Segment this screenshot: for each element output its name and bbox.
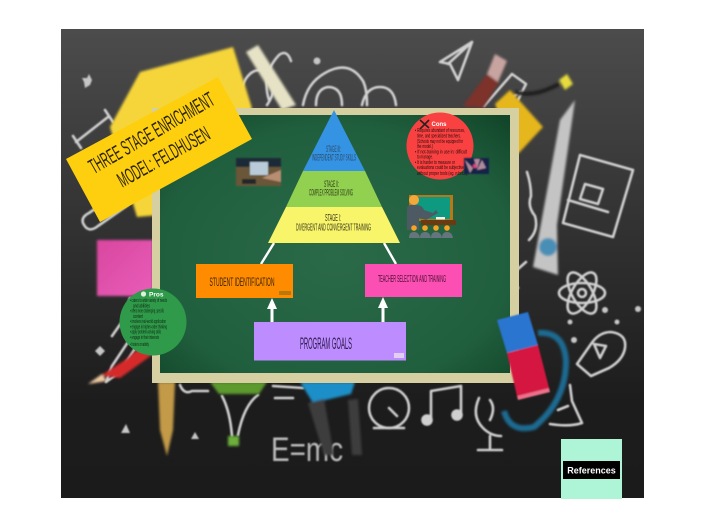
- pink eraser: [97, 240, 153, 296]
- thumbnail: art: [464, 158, 489, 174]
- stage II: [286, 171, 382, 207]
- cons circle: • If not-training in use in: difficult: [415, 150, 467, 156]
- yellow pencil: [158, 382, 175, 456]
- red pencil: [88, 338, 156, 384]
- pros circle: and abilities: [133, 304, 150, 310]
- pros circle: • involves real-world application: [130, 319, 166, 325]
- chalkboard background: [61, 29, 644, 498]
- student identification box: STUDENT IDENTIFICATION: [210, 275, 274, 289]
- cons circle: without proper tools (eg. rubrics).: [417, 171, 468, 177]
- marker top right: [463, 74, 499, 108]
- pros circle: • engage in higher-order thinking: [130, 324, 167, 330]
- program goals box: PROGRAM GOALS: [300, 334, 352, 353]
- green board surface: [160, 115, 510, 373]
- arrow: goals to student identification: [267, 298, 277, 322]
- green marker: [210, 382, 267, 394]
- stage I: DIVERGENT AND CONVERGENT TRAINING: [296, 222, 371, 234]
- stage III: [303, 110, 365, 171]
- stage I: [268, 207, 400, 243]
- pyramid: INDEPENDENT STUDY SKILLS: [312, 152, 356, 162]
- blue loop: [504, 333, 566, 428]
- student identification box: [196, 264, 293, 298]
- pros circle: • engage in their interests: [130, 335, 159, 341]
- photo: laptop: [236, 158, 281, 186]
- pros circle: Pros: [149, 292, 164, 298]
- references button: [561, 439, 622, 499]
- pros circle: content: [133, 314, 143, 320]
- board frame: [152, 108, 519, 383]
- title banner: MODEL: FELDHUSEN: [114, 123, 214, 192]
- icon: check: [141, 291, 146, 297]
- formula doodle: E=mc: [271, 431, 343, 469]
- cons circle: evaluations could be subjective: [417, 165, 464, 171]
- pyramid: [268, 110, 400, 243]
- stage III: STAGE III:: [326, 144, 341, 154]
- cons circle: the model.): [417, 144, 433, 150]
- cons circle: [406, 112, 474, 180]
- pros circle: • fosters creativity: [130, 342, 149, 348]
- cons circle: time, and specialized teachers.: [417, 134, 461, 140]
- pros circle: [120, 288, 186, 356]
- chalk doodles: [73, 42, 633, 450]
- ruler knife: [533, 100, 575, 275]
- dark strap: [308, 399, 362, 455]
- eraser: [497, 312, 550, 400]
- stage II: COMPLEX PROBLEM SOLVING: [309, 188, 353, 198]
- stage II: STAGE II:: [324, 179, 339, 189]
- title banner: [66, 77, 252, 222]
- school supplies behind board: [88, 45, 575, 456]
- cons circle: • Requires abundant of resources,: [415, 128, 465, 134]
- yellow block: [495, 90, 543, 154]
- pros circle: • offers more challenging, specific: [130, 308, 164, 314]
- pros circle: • caters to wide variety of needs: [130, 298, 167, 304]
- stars: [82, 58, 641, 439]
- connector lines: [261, 243, 396, 264]
- icon: teacher at board: [407, 195, 456, 238]
- arrow: goals to teacher selection: [378, 297, 388, 322]
- title banner: THREE STAGE ENRICHMENT: [85, 88, 219, 179]
- icon: crossed tools: [420, 120, 429, 129]
- cons circle: to manage.: [417, 154, 433, 160]
- sticky note: [110, 47, 252, 217]
- references button: References: [567, 466, 616, 476]
- text: TEACHER SELECTION AND TRAINING: [378, 274, 446, 285]
- program goals box: [254, 322, 406, 360]
- cons circle: Cons: [432, 122, 447, 128]
- teacher selection box: [365, 264, 462, 297]
- blue block: [300, 382, 355, 403]
- stage I: STAGE I:: [325, 213, 341, 224]
- cons circle: (Schools may not be equipped for: [417, 139, 463, 145]
- pros circle: • apply problem-solving skills: [130, 330, 161, 336]
- cons circle: • It is harder to measure or: [415, 160, 455, 166]
- pencil top: [246, 45, 296, 110]
